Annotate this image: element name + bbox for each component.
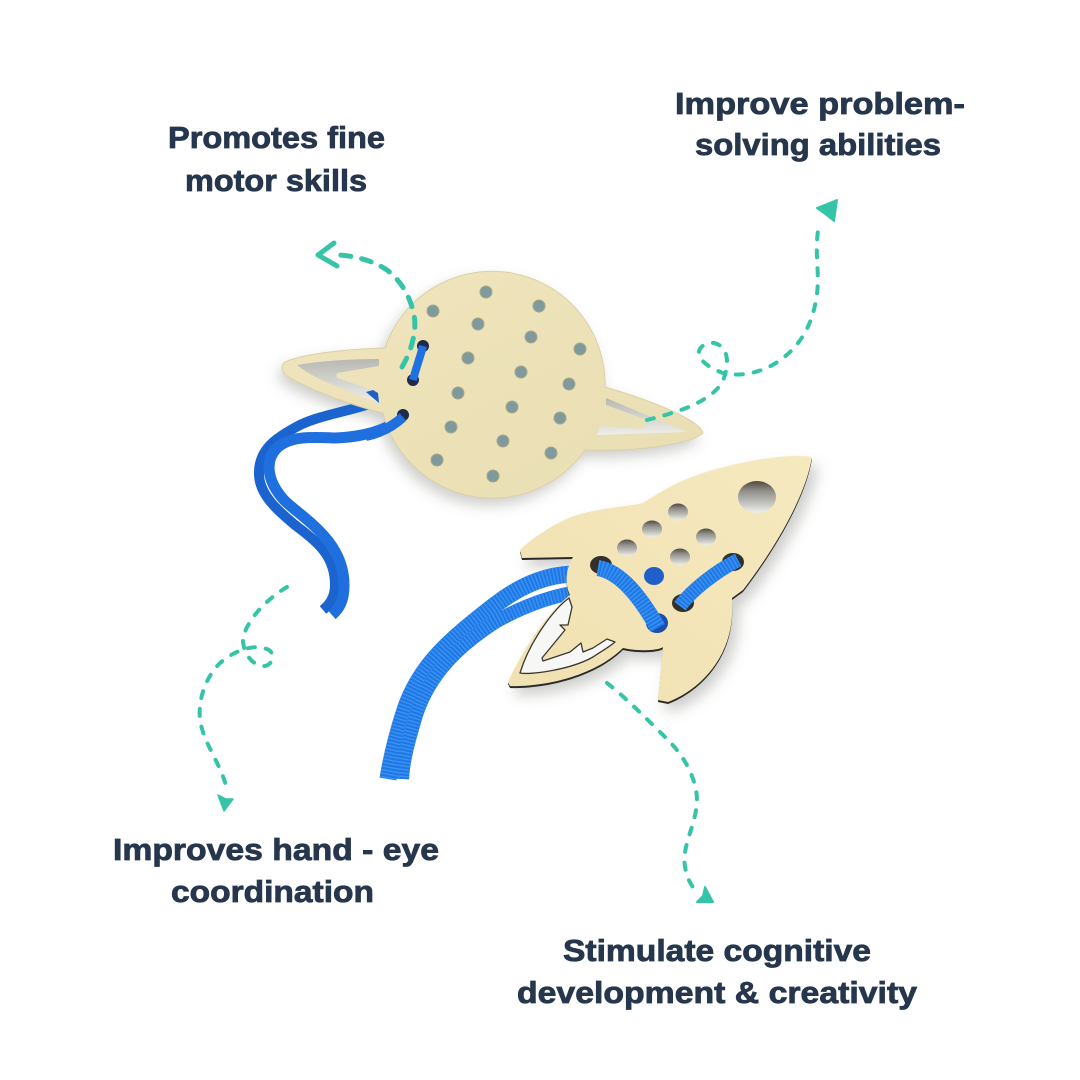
planet holes — [427, 286, 586, 482]
arrow: cognitive development — [607, 683, 713, 902]
arrow: fine motor skills — [318, 243, 415, 367]
label: improves hand-eye coordination — [113, 832, 439, 909]
planet body — [282, 271, 703, 498]
label: improves hand-eye coordination: Improves hand - eye — [113, 832, 439, 867]
rocket holes — [617, 481, 776, 566]
planet lace through holes — [366, 340, 429, 436]
label: stimulate cognitive development — [517, 933, 918, 1010]
label: improves hand-eye coordination: coordination — [171, 874, 374, 909]
arrow: problem solving — [647, 200, 837, 420]
planet rope — [259, 402, 403, 615]
label: improve problem-solving abilities: solving abilities — [695, 127, 941, 162]
rocket edge — [508, 458, 812, 704]
label: improve problem-solving abilities: Improve problem- — [675, 86, 965, 121]
rocket lacing toy — [388, 456, 818, 779]
rocket body — [508, 456, 812, 702]
label: promotes fine motor skills — [168, 120, 385, 198]
exhaust cutout — [520, 598, 615, 673]
label: promotes fine motor skills: Promotes fine — [168, 120, 385, 155]
arrow: hand-eye coordination — [200, 587, 287, 811]
right ring cutout — [597, 398, 687, 435]
rocket rope — [388, 574, 572, 779]
label: improve problem-solving abilities — [675, 86, 965, 162]
left ring cutout — [297, 359, 379, 403]
rocket lace through holes — [590, 553, 744, 633]
planet lacing toy — [259, 271, 703, 615]
label: promotes fine motor skills: motor skills — [185, 163, 367, 198]
label: stimulate cognitive development: Stimulate cognitive — [563, 933, 871, 968]
label: stimulate cognitive development: development & creativity — [517, 975, 918, 1010]
